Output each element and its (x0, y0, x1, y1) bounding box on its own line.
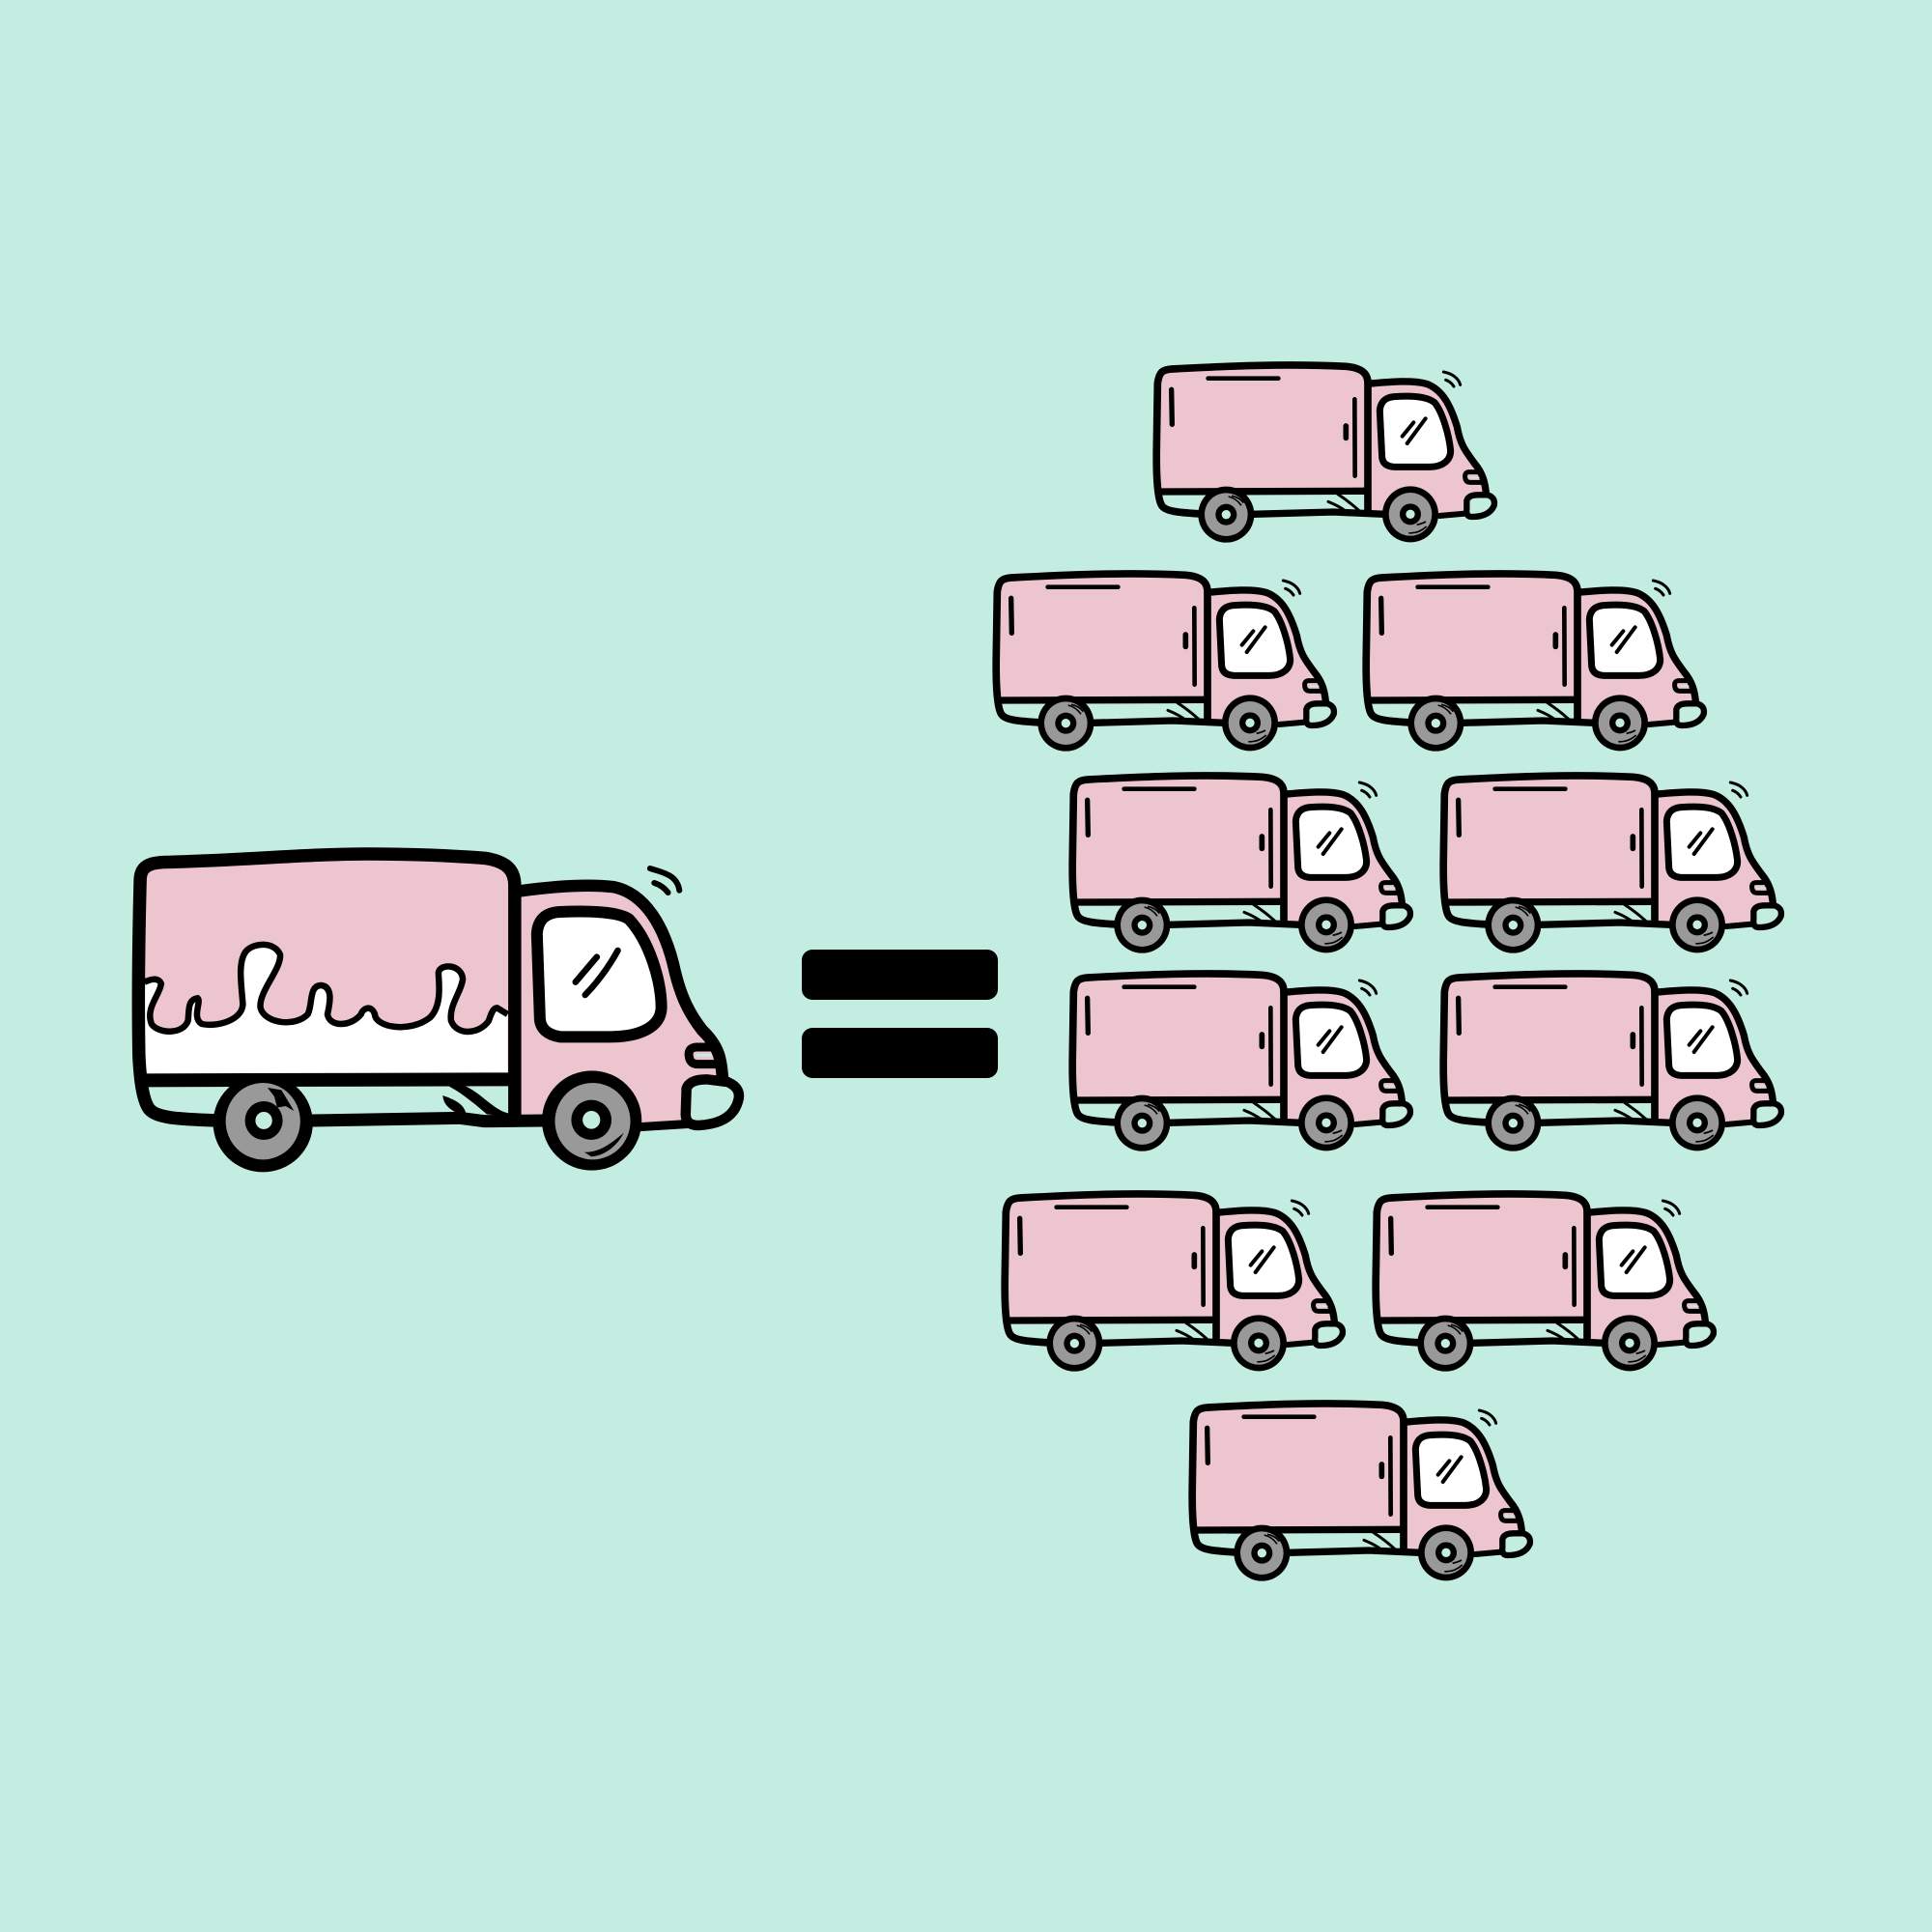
large truck window (537, 911, 662, 1037)
small truck 10 (1192, 1404, 1530, 1581)
small truck 6 (1072, 974, 1410, 1151)
large truck cab fill (520, 886, 723, 1125)
bumper (686, 1079, 739, 1125)
small truck 7 (1443, 974, 1781, 1151)
small truck 4 (1072, 776, 1410, 953)
equals sign (802, 950, 998, 1078)
small truck 3 (1366, 574, 1704, 752)
small truck 8 (1005, 1194, 1343, 1372)
white empty area of cargo box (144, 945, 507, 1075)
front wheel (542, 1070, 641, 1171)
small truck 1 (1156, 365, 1494, 543)
rear wheel (213, 1074, 313, 1172)
large truck with partial fill (138, 854, 739, 1172)
large truck cargo box fill (140, 854, 515, 1080)
small truck 5 (1443, 776, 1781, 953)
window glints (576, 951, 618, 995)
small truck 9 (1376, 1194, 1714, 1372)
headlight (689, 1047, 717, 1065)
step bars (442, 1085, 512, 1118)
motion marks (650, 868, 679, 893)
wavy fill level line (144, 945, 507, 1032)
small truck 2 (996, 574, 1334, 752)
large truck outlines (138, 854, 739, 1127)
